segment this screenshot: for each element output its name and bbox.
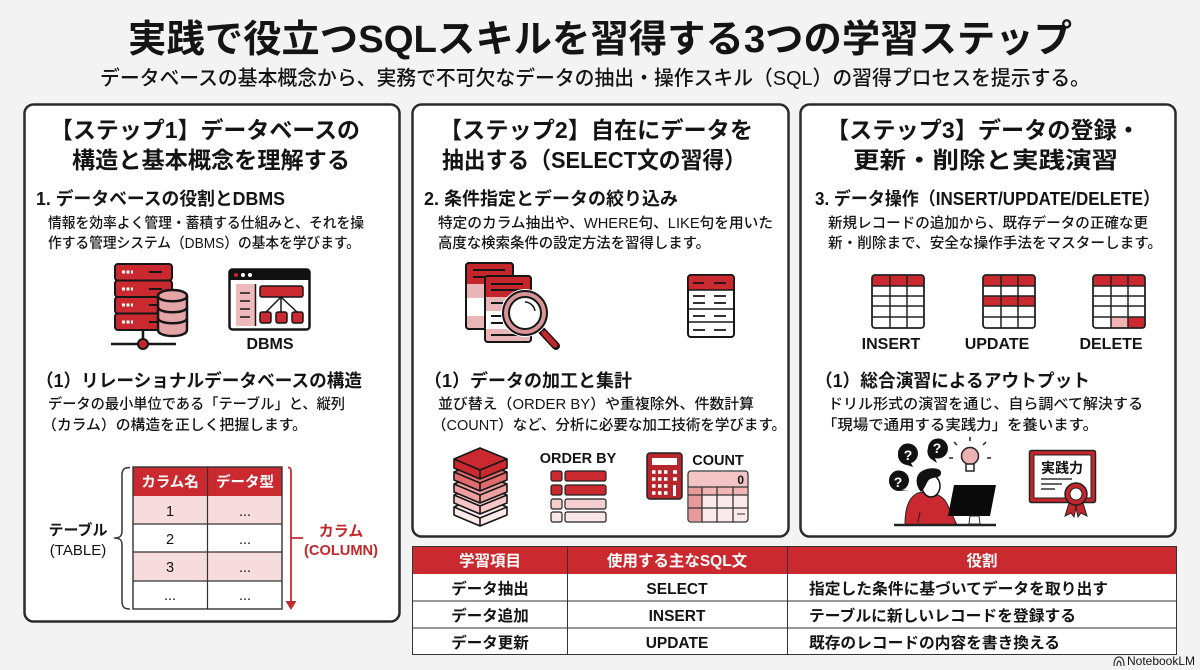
- text block: relational structure: データの最小単位である「テーブル」と、縦列: [48, 395, 345, 413]
- text block: relational structure: [36, 370, 362, 434]
- subtitle: データベースの基本概念から、実務で不可欠なデータの抽出・操作スキル（SQL）の習得プロセスを提示する。: [100, 66, 1090, 90]
- icon: learner at computer: [889, 437, 996, 525]
- text block: processing and aggregation: [424, 370, 786, 434]
- heading: step 3: 更新・削除と実践演習: [853, 147, 1118, 173]
- title: 実践で役立つSQLスキルを習得する3つの学習ステップ: [128, 19, 1072, 61]
- icon: DELETE table: DELETE: [1079, 336, 1143, 353]
- icon: DBMS window: [229, 269, 310, 330]
- text block: relational structure: （1）リレーショナルデータベースの構造: [36, 370, 362, 391]
- row: data insertion: テーブルに新しいレコードを登録する: [809, 606, 1076, 625]
- text block: data operations: 新規レコードの追加から、既存データの正確な更: [828, 214, 1148, 232]
- icon: documents and magnifier: [466, 263, 556, 346]
- icon: DELETE table: [1079, 275, 1145, 353]
- text block: filtering: 2. 条件指定とデータの絞り込み: [424, 188, 678, 209]
- table label: (TABLE): [50, 542, 106, 559]
- text block: relational structure: （カラム）の構造を正しく把握します。: [42, 416, 307, 434]
- icon: learner at computer: ?: [894, 474, 902, 490]
- diagram: table structure: [48, 467, 378, 610]
- heading: step 2: 【ステップ2】自在にデータを: [439, 117, 753, 143]
- text block: database role and DBMS: 作する管理システム（DBMS）の基本を学びます。: [48, 234, 360, 252]
- heading: step 1: 【ステップ1】データベースの: [50, 117, 360, 143]
- icon: COUNT table: 0: [737, 473, 744, 487]
- text block: comprehensive exercise: [815, 371, 1143, 434]
- column label: (COLUMN): [304, 542, 378, 559]
- label: DBMS: DBMS: [246, 336, 294, 353]
- row: data extraction: [451, 579, 1108, 598]
- example table: ...: [164, 588, 176, 604]
- text block: database role and DBMS: 1. データベースの役割とDBMS: [36, 188, 285, 209]
- example table: ...: [239, 532, 251, 548]
- table header: 学習項目: [459, 551, 521, 570]
- text block: filtering: [424, 188, 773, 252]
- row: data extraction: 指定した条件に基づいてデータを取り出す: [809, 579, 1108, 598]
- icon: learner at computer: ?: [933, 440, 941, 456]
- icon: COUNT table: COUNT: [692, 453, 744, 469]
- example table: ...: [239, 560, 251, 576]
- heading: step 3: [826, 117, 1140, 173]
- example table: ...: [239, 588, 251, 604]
- table brace: [114, 468, 130, 609]
- icon: COUNT table: [688, 453, 748, 522]
- text block: comprehensive exercise: ドリル形式の演習を通じ、自ら調べて解決する: [828, 396, 1143, 413]
- heading: step 3: 【ステップ3】データの登録・: [826, 117, 1140, 143]
- heading: step 2: 抽出する（SELECT文の習得）: [442, 147, 746, 173]
- example table: 3: [166, 560, 174, 576]
- column arrow: [286, 468, 303, 610]
- example table: ...: [239, 504, 251, 520]
- text block: database role and DBMS: [36, 188, 364, 252]
- table header: [412, 546, 1177, 574]
- example table: 1: [166, 504, 174, 520]
- panel: step 1: [24, 104, 400, 622]
- row: data update: UPDATE: [646, 635, 708, 652]
- text block: processing and aggregation: （1）データの加工と集計: [424, 370, 632, 391]
- column label: [304, 523, 378, 559]
- row: data extraction: データ抽出: [451, 579, 529, 598]
- row: data insertion: INSERT: [649, 608, 706, 625]
- row: data update: データ更新: [451, 633, 529, 652]
- row: data insertion: [451, 606, 1076, 625]
- watermark: NotebookLM: NotebookLM: [1127, 654, 1195, 668]
- icon: server and database: [111, 264, 187, 349]
- icon: UPDATE table: [965, 275, 1035, 353]
- text block: data operations: 3. データ操作（INSERT/UPDATE/DELETE）: [815, 188, 1160, 209]
- text block: filtering: 特定のカラム抽出や、WHERE句、LIKE句を用いた: [438, 215, 773, 232]
- text block: data operations: 新・削除まで、安全な操作手法をマスターします。: [828, 235, 1162, 252]
- text block: comprehensive exercise: 「現場で通用する実践力」を養います。: [822, 417, 1098, 434]
- table label: テーブル: [48, 521, 108, 539]
- icon: certificate: 実践力: [1041, 460, 1083, 476]
- column label: カラム: [319, 523, 363, 540]
- icon: INSERT table: [862, 275, 924, 353]
- row: data insertion: データ追加: [451, 606, 529, 625]
- example table: データ型: [216, 473, 274, 491]
- icon: ORDER BY: ORDER BY: [540, 451, 617, 467]
- table: SQL summary: [412, 546, 1177, 655]
- text block: database role and DBMS: 情報を効率よく管理・蓄積する仕組みと、それを操: [48, 214, 364, 232]
- icon: layered stack: [454, 448, 507, 526]
- icon: UPDATE table: UPDATE: [965, 336, 1030, 353]
- heading: step 2: [439, 117, 753, 173]
- icon: learner at computer: ?: [904, 447, 912, 463]
- row: data update: [451, 633, 1060, 652]
- text block: data operations: [815, 188, 1162, 252]
- heading: step 1: [50, 117, 360, 173]
- heading: step 1: 構造と基本概念を理解する: [72, 147, 350, 173]
- table header: 役割: [966, 551, 998, 570]
- example table: カラム名: [141, 473, 199, 491]
- example table: 2: [166, 532, 174, 548]
- icon: certificate: [1030, 450, 1096, 517]
- icon: small table: [688, 275, 734, 337]
- text block: processing and aggregation: （COUNT）など、分析に必要な加工技術を学びます。: [432, 417, 786, 434]
- row: data update: 既存のレコードの内容を書き換える: [809, 633, 1060, 652]
- icon: INSERT table: INSERT: [862, 336, 921, 353]
- text block: processing and aggregation: 並び替え（ORDER BY）や重複除外、件数計算: [438, 395, 754, 413]
- example table: [133, 467, 282, 609]
- table label: [48, 521, 108, 559]
- panel: step 2: [412, 104, 788, 536]
- icon: calculator: [647, 453, 682, 499]
- row: data extraction: SELECT: [646, 581, 708, 598]
- text block: filtering: 高度な検索条件の設定方法を習得します。: [438, 235, 710, 252]
- table header: 使用する主なSQL文: [607, 552, 748, 570]
- panel: step 3: [800, 104, 1176, 536]
- text block: comprehensive exercise: （1）総合演習によるアウトプット: [815, 371, 1090, 391]
- icon: ORDER BY: [540, 451, 617, 522]
